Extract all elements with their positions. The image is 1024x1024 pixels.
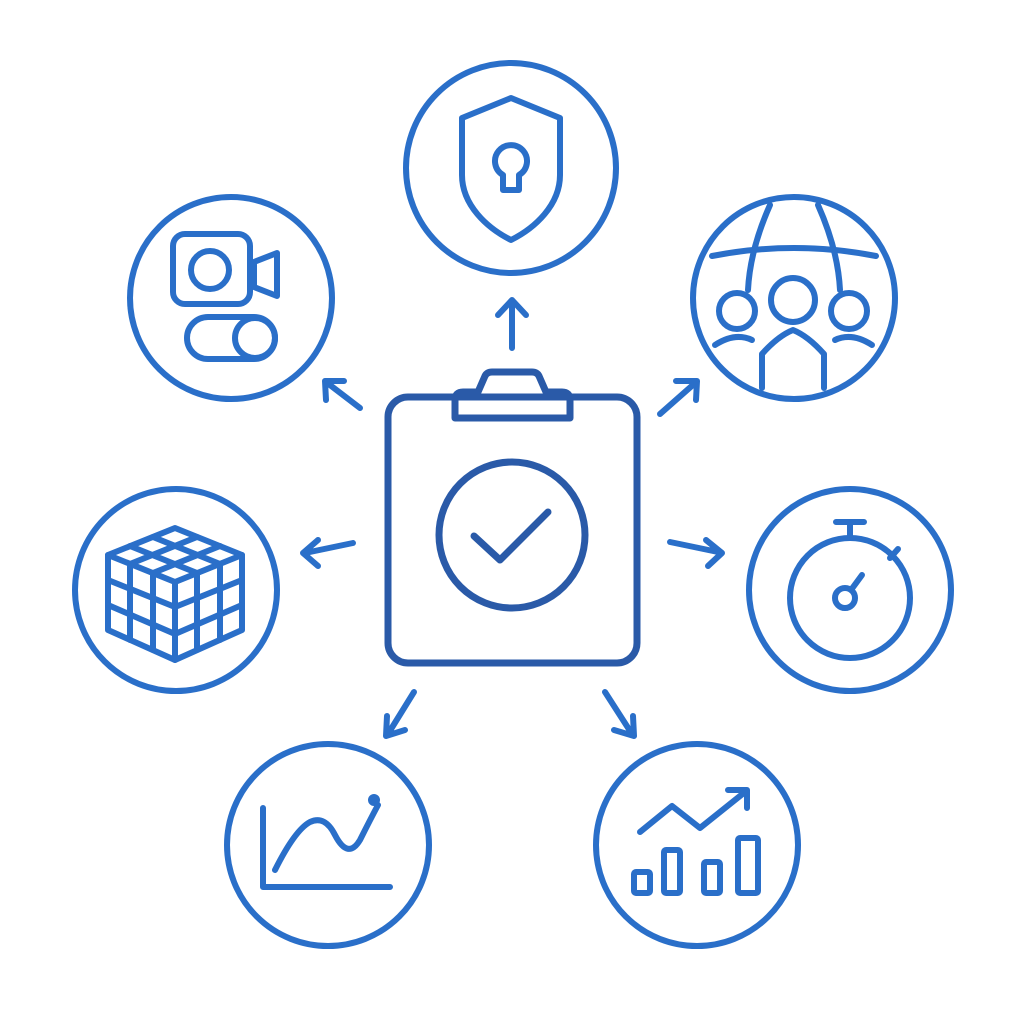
icon: stopwatch [749, 489, 951, 691]
icon: global community [693, 197, 895, 399]
icon: bar chart growth [596, 744, 798, 946]
arrows [303, 300, 722, 736]
center clipboard [388, 372, 637, 663]
icon: line chart [227, 744, 429, 946]
icon: cube [75, 489, 277, 691]
icon: video camera toggle [130, 197, 332, 399]
icon: security shield [406, 63, 616, 273]
